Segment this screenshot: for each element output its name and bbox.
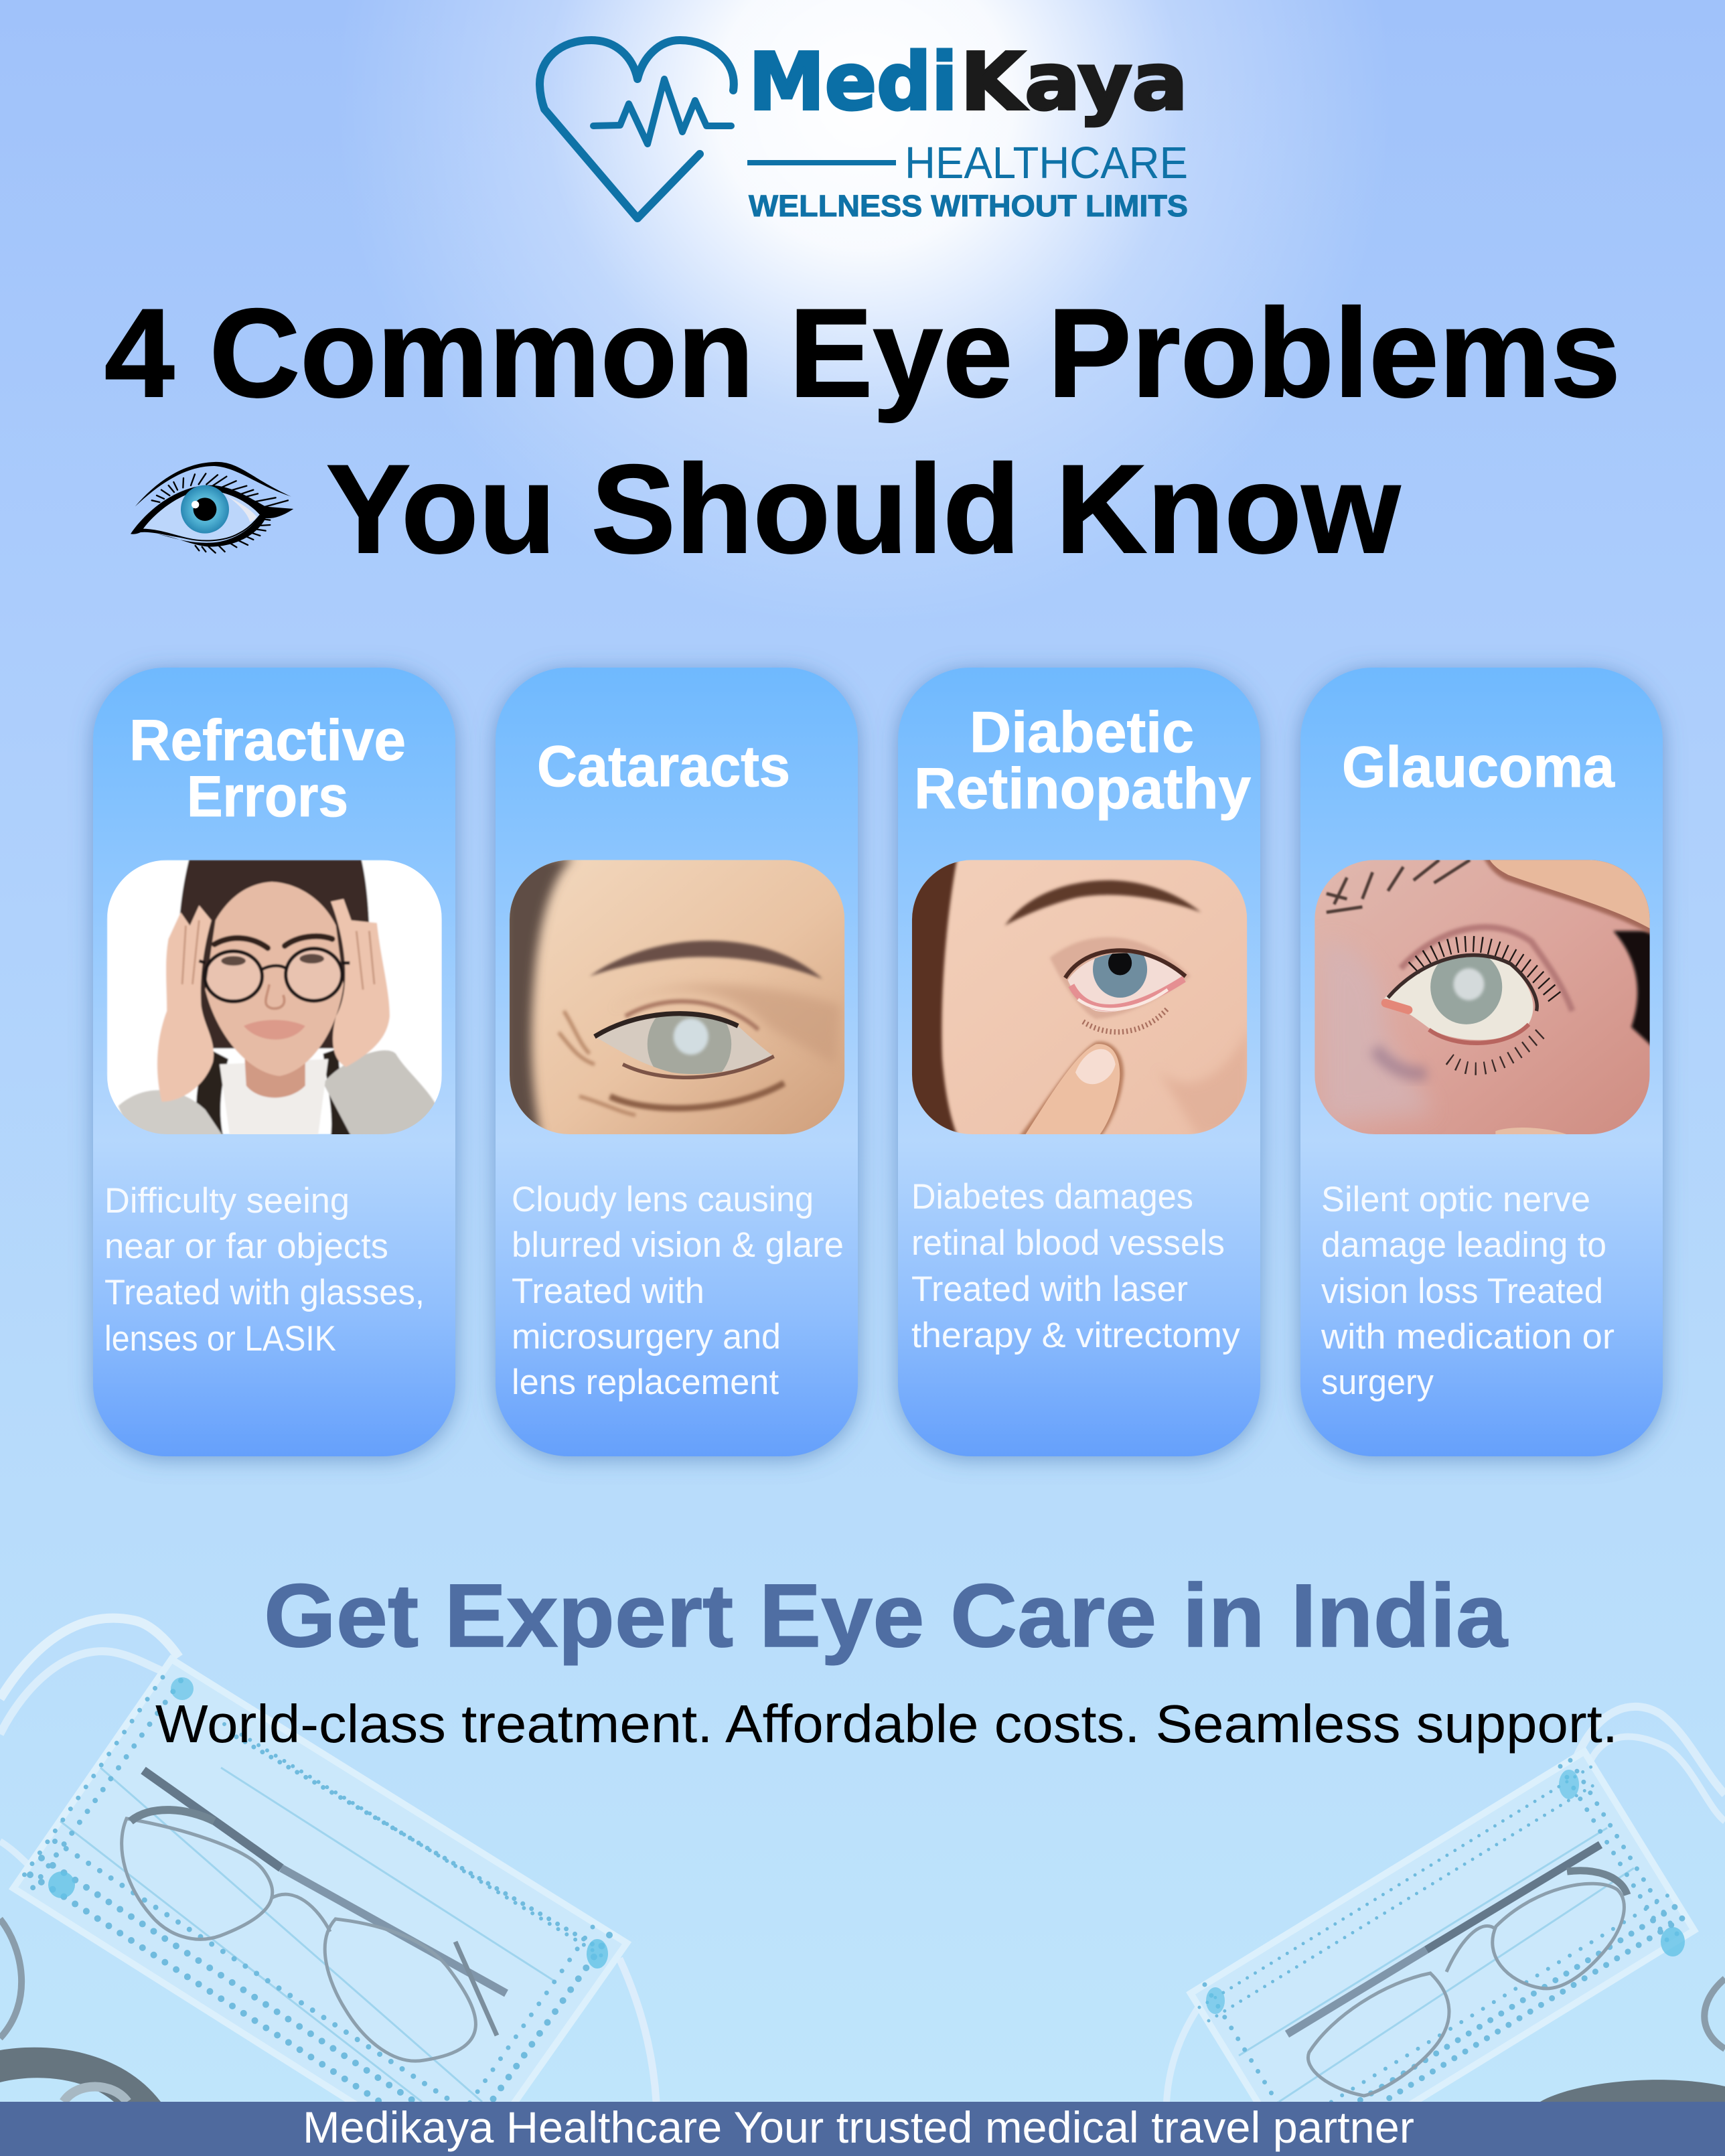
footer band: [0, 2102, 1725, 2156]
title: 4 Common Eye Problems: [104, 283, 1621, 423]
body text: blurred vision & glare: [512, 1225, 844, 1265]
body text: therapy & vitrectomy: [911, 1316, 1241, 1355]
background: left face mask with glasses: [0, 1618, 656, 2156]
body text: Difficulty seeing: [104, 1181, 350, 1221]
icon: eye: [131, 462, 293, 553]
panel: Refractive Errors: [93, 668, 455, 1456]
heading: Diabetic Retinopathy: Retinopathy: [914, 757, 1251, 821]
heading: Refractive Errors: Errors: [187, 765, 348, 829]
body text: vision loss Treated: [1321, 1272, 1603, 1311]
body text: Diabetes damages: [911, 1177, 1193, 1217]
heading: Glaucoma: Glaucoma: [1342, 735, 1615, 799]
title: [104, 283, 1621, 579]
icon: heart with heartbeat: [540, 40, 734, 218]
body text: Treated with: [512, 1272, 704, 1311]
tagline: World-class treatment. Affordable costs. Seamless support.: [155, 1694, 1618, 1754]
photo: red eye with finger pulling lower lid: [907, 856, 1250, 1136]
body text: lens replacement: [512, 1363, 779, 1402]
body text: [512, 1180, 844, 1402]
panel: Diabetic Retinopathy: [898, 668, 1260, 1456]
background: stethoscope fragments: [0, 1919, 1725, 2102]
body text: Cloudy lens causing: [512, 1180, 814, 1219]
heading: Refractive Errors: [129, 708, 406, 829]
body text: microsurgery and: [512, 1317, 781, 1357]
body text: near or far objects: [104, 1227, 388, 1266]
body text: damage leading to: [1321, 1225, 1606, 1265]
body text: retinal blood vessels: [911, 1223, 1225, 1263]
body text: with medication or: [1321, 1317, 1615, 1357]
title: You Should Know: [326, 439, 1401, 579]
body text: Treated with glasses,: [104, 1273, 425, 1312]
body text: Silent optic nerve: [1321, 1180, 1590, 1219]
photo: eye with cataract: [502, 856, 844, 1136]
heading: Diabetic Retinopathy: Diabetic: [970, 700, 1194, 765]
logo wordmark: Medi: [749, 35, 958, 128]
logo: MediKaya Healthcare: WELLNESS WITHOUT LIMITS: [749, 189, 1188, 223]
heading: Cataracts: Cataracts: [537, 735, 790, 799]
logo: MediKaya Healthcare: [540, 35, 1188, 223]
body text: Treated with laser: [911, 1269, 1188, 1309]
body text: surgery: [1321, 1363, 1434, 1402]
logo: MediKaya Healthcare: HEALTHCARE: [905, 138, 1188, 188]
logo: MediKaya Healthcare: Kaya: [960, 35, 1188, 128]
footer band: Medikaya Healthcare Your trusted medical travel partner: [303, 2102, 1414, 2152]
panel: Cataracts: [496, 668, 858, 1456]
panel: Glaucoma: [1300, 668, 1663, 1456]
photo: woman with glasses holding her head: [107, 860, 442, 1136]
body text: [911, 1177, 1241, 1355]
body text: lenses or LASIK: [104, 1319, 336, 1359]
heading: Get Expert Eye Care in India: Get Expert Eye Care in India: [264, 1566, 1509, 1666]
heading: Refractive Errors: Refractive: [129, 708, 406, 773]
body text: [1321, 1180, 1615, 1402]
photo: eye with glaucoma: [1315, 856, 1654, 1136]
heading: Diabetic Retinopathy: [914, 700, 1251, 821]
background: right face mask with glasses: [1167, 1707, 1725, 2156]
body text: [104, 1181, 425, 1359]
